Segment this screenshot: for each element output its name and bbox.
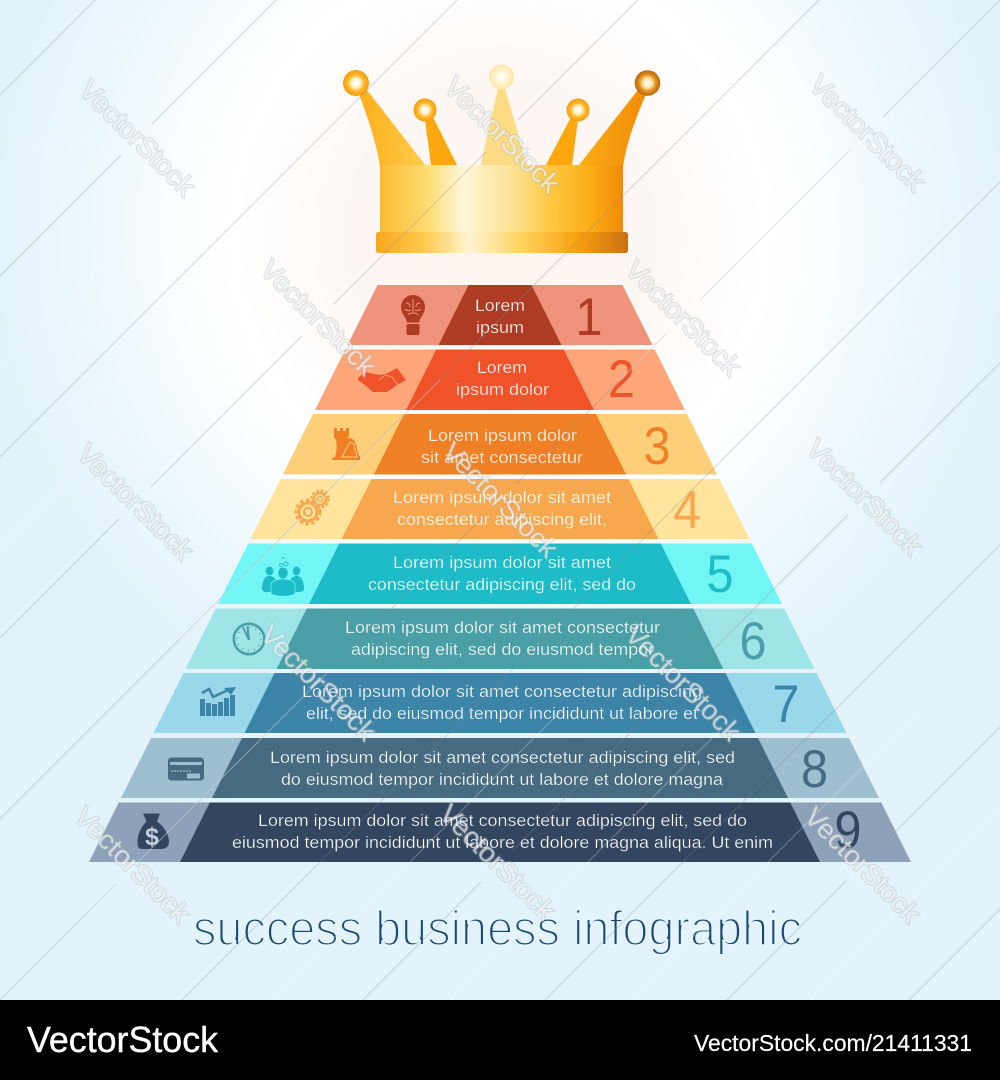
- watermarks: VectorStock: [436, 436, 564, 564]
- watermarks: VectorStock: [803, 69, 931, 197]
- watermarks: [68, 69, 931, 929]
- level 9: 9: [834, 801, 862, 860]
- level 2: [315, 350, 685, 410]
- icon: business team: [262, 557, 304, 596]
- watermarks: VectorStock: [254, 254, 382, 382]
- level 2: 2: [608, 350, 635, 409]
- watermarks: VectorStock: [71, 438, 199, 566]
- pyramid: [89, 285, 911, 862]
- watermarks: VectorStock: [798, 801, 926, 929]
- level 9: eiusmod tempor incididunt ut labore et dolore magna aliqua. Ut enim: [232, 833, 773, 852]
- level 8: do eiusmod tempor incididunt ut labore et dolore magna: [281, 770, 724, 789]
- level 5: Lorem ipsum dolor sit amet: [393, 553, 611, 572]
- level 4: 4: [673, 481, 701, 540]
- level 3: sit amet consectetur: [421, 448, 583, 467]
- level 3: Lorem ipsum dolor: [428, 426, 577, 445]
- crown left spike: [359, 90, 426, 167]
- level 2: ipsum dolor: [456, 380, 549, 399]
- level 1: 1: [576, 288, 602, 347]
- watermarks: VectorStock: [433, 798, 561, 926]
- level 6: [186, 608, 814, 671]
- level 7: elit, sed do eiusmod tempor incididunt ut labore et: [306, 704, 698, 723]
- level 6: Lorem ipsum dolor sit amet consectetur: [345, 618, 660, 637]
- icon: credit card: [168, 758, 204, 780]
- level 1: [348, 285, 652, 347]
- crown inner right spike: [546, 117, 578, 165]
- level 7: 7: [772, 675, 800, 734]
- watermarks: VectorStock: [619, 619, 747, 747]
- watermarks: VectorStock: [68, 801, 196, 929]
- icon: money bag: $: [145, 823, 159, 851]
- footer bar: [0, 1000, 1000, 1080]
- icon: money bag: [138, 814, 169, 851]
- watermarks: VectorStock: [438, 71, 566, 199]
- level 4: consectetur adipiscing elit,: [397, 510, 607, 529]
- level 2: Lorem: [477, 358, 527, 377]
- level 4: [250, 479, 750, 540]
- icon: chess pieces: [332, 428, 360, 460]
- level 3: [283, 414, 717, 476]
- icon: gears: [296, 490, 328, 524]
- crown inner left spike: [425, 117, 457, 165]
- level 7: Lorem ipsum dolor sit amet consectetur adipiscing: [302, 682, 702, 701]
- level 8: [121, 738, 879, 799]
- crown centre spike: [480, 88, 528, 168]
- watermarks: VectorStock: [800, 433, 928, 561]
- level 5: 5: [706, 545, 734, 604]
- icon: clock: [232, 622, 266, 656]
- crown right spike: [579, 90, 646, 167]
- level 8: Lorem ipsum dolor sit amet consectetur adipiscing elit, sed: [270, 748, 735, 767]
- level 9: Lorem ipsum dolor sit amet consectetur adipiscing elit, sed do: [258, 811, 747, 830]
- level 9: [89, 801, 911, 862]
- watermarks: VectorStock: [254, 619, 382, 747]
- level 1: Lorem: [475, 296, 525, 315]
- watermarks: VectorStock: [73, 74, 201, 202]
- level 1: ipsum: [476, 318, 524, 337]
- title: success business infographic: [193, 902, 802, 956]
- crown balls: [343, 64, 660, 122]
- footer image id: VectorStock.com/21411331: [694, 1030, 972, 1056]
- level 7: [154, 673, 846, 734]
- crown band: [376, 232, 628, 253]
- level 4: Lorem ipsum dolor sit amet: [393, 488, 611, 507]
- icon: handshake: [358, 368, 406, 392]
- level 5: [218, 544, 782, 604]
- level 5: consectetur adipiscing elit, sed do: [368, 575, 636, 594]
- icon: brain light bulb: [401, 295, 425, 335]
- crown body: [380, 165, 623, 233]
- level 3: 3: [644, 417, 670, 476]
- footer brand: VectorStock: [27, 1019, 219, 1060]
- icon: growth chart: [200, 687, 236, 716]
- level 6: adipiscing elit, sed do eiusmod tempor: [351, 640, 654, 659]
- crown: [343, 64, 660, 253]
- watermarks: VectorStock: [619, 254, 747, 382]
- level 8: 8: [801, 740, 828, 799]
- level 6: 6: [740, 612, 766, 671]
